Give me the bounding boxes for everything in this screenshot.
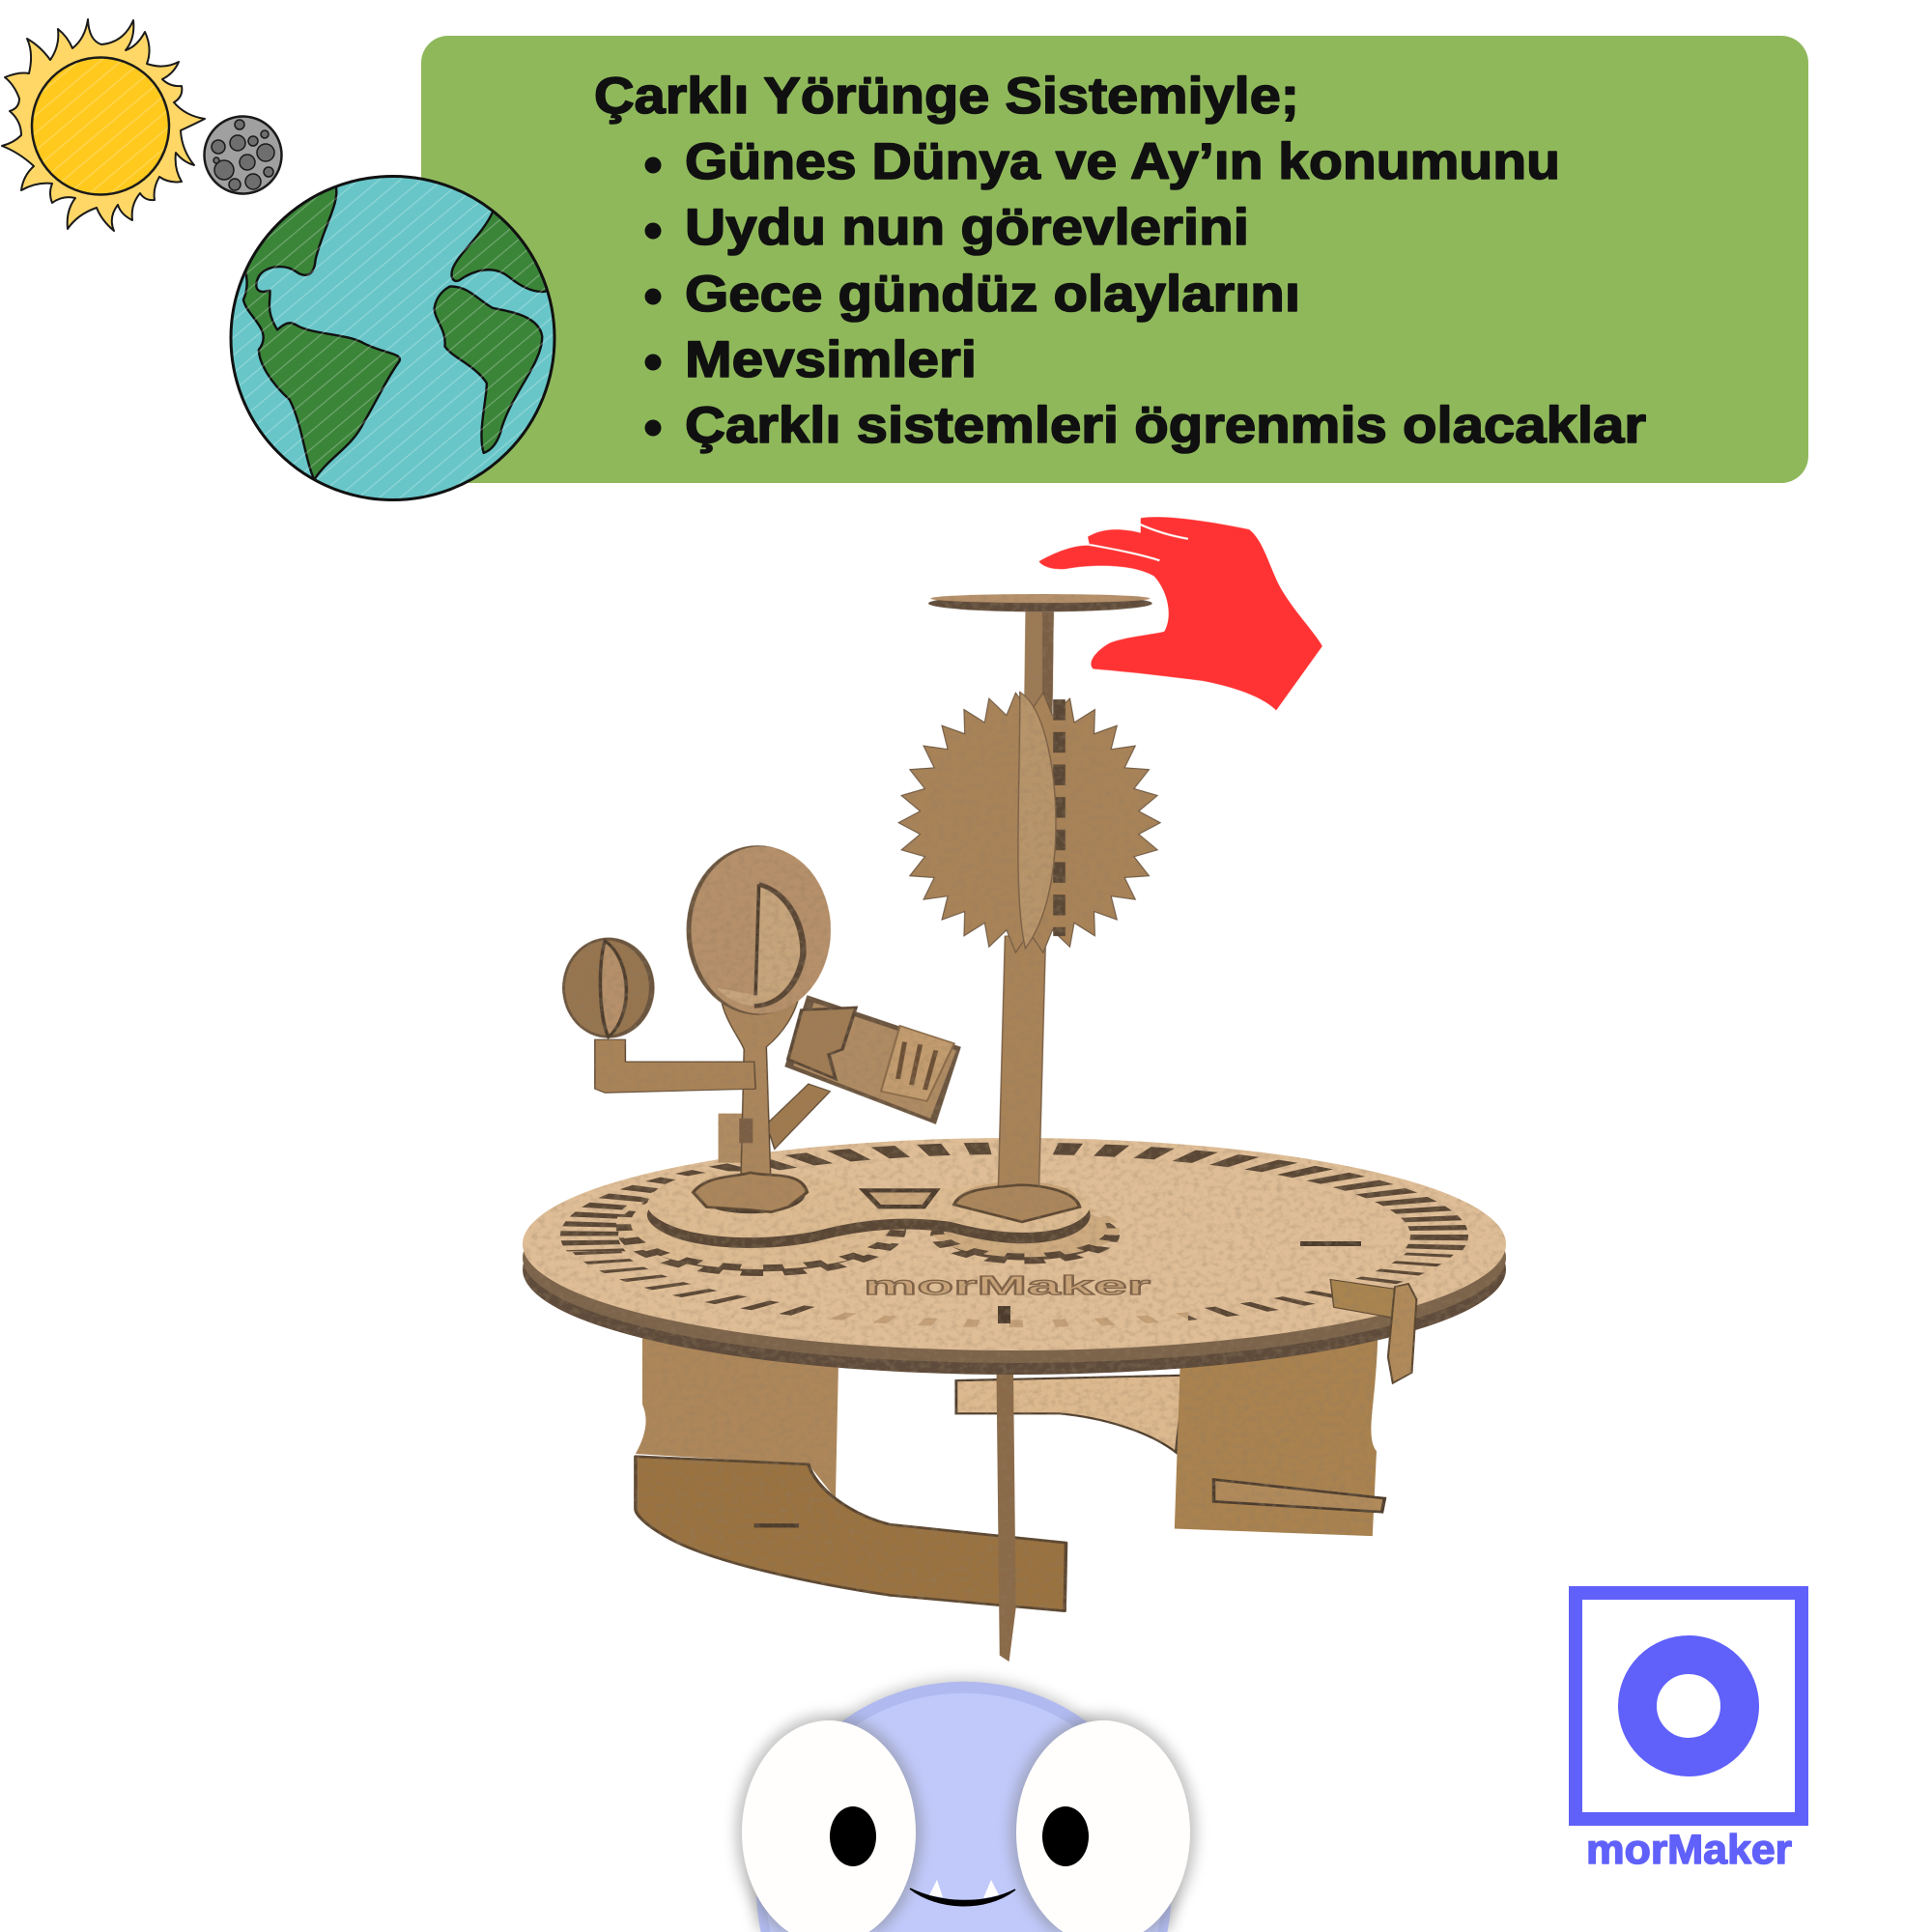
engraved logo on disc: morMaker [864, 1270, 1151, 1300]
illustration: wooden orrery model [523, 594, 1506, 1662]
panel: green text box [421, 36, 1808, 483]
text block: bullet list [645, 133, 1646, 454]
mascot left eye [736, 1715, 922, 1932]
sun gear [898, 693, 1160, 952]
earth and moon stand, satellite and sun post [562, 594, 1160, 1222]
sun post foot [954, 1185, 1080, 1222]
text block: bullet list: Gece gündüz olaylarını [685, 266, 1300, 323]
sun post lower [998, 936, 1045, 1190]
mascot head [756, 1682, 1172, 1932]
moon ball [562, 938, 655, 1038]
americas [242, 187, 547, 479]
small gear [943, 1211, 1107, 1260]
text block: bullet list: Uydu nun görevlerini [685, 199, 1249, 256]
model legs and lower plates [636, 1321, 1384, 1662]
logo: morMaker [1576, 1593, 1802, 1873]
icon: moon [205, 116, 282, 193]
earth foot [694, 1173, 807, 1212]
large planet gear [631, 1188, 892, 1271]
icon: earth [231, 166, 573, 501]
mascot right eye [1010, 1715, 1196, 1932]
disc top [523, 1138, 1506, 1350]
africa and europe [450, 212, 547, 294]
moon arm [595, 1039, 755, 1093]
mascot mouth [910, 1880, 1015, 1906]
earth disc [687, 845, 829, 1015]
icon: red hand [1038, 517, 1322, 710]
stem bracket [719, 1114, 746, 1163]
mascot [736, 1679, 1196, 1932]
text block: bullet list: Mevsimleri [685, 331, 977, 388]
sun gear centre plate [1018, 692, 1060, 949]
earth half disc [717, 884, 803, 1006]
heading: panel title: Çarklı Yörünge Sistemiyle; [594, 68, 1299, 125]
disc edge [523, 1164, 1506, 1375]
text block: bullet list: Günes Dünya ve Ay’ın konumunu [685, 133, 1560, 190]
right clip [1330, 1280, 1416, 1383]
icon: sun [2, 19, 205, 231]
logo wordmark: morMaker [1586, 1827, 1792, 1873]
toothed ring [584, 1148, 1444, 1323]
sun post upper [1024, 611, 1054, 714]
text block: bullet list: Çarklı sistemleri ögrenmis olacaklar [685, 397, 1646, 454]
disc slots [998, 1241, 1361, 1323]
stem and neck [721, 990, 800, 1192]
linking arm [647, 1171, 1091, 1248]
satellite strut [766, 1084, 830, 1149]
satellite [784, 995, 961, 1124]
logo ring [1637, 1655, 1740, 1757]
top disc [928, 595, 1152, 611]
